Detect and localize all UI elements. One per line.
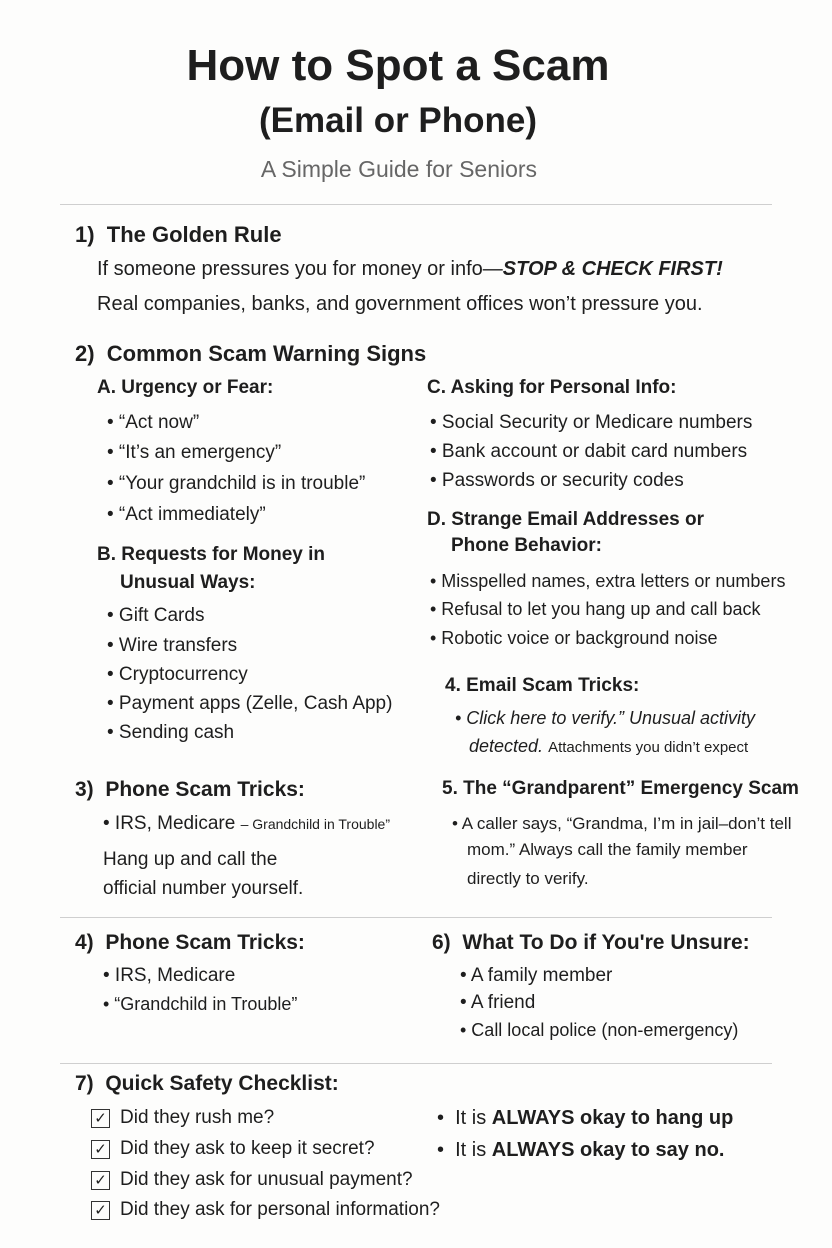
section 6: what to do: • A friend: [460, 992, 535, 1013]
section 6: what to do: [432, 931, 750, 1040]
subtitle: email or phone: (Email or Phone): [259, 101, 537, 140]
section 7: checklist: • It is ALWAYS okay to hang up: [437, 1107, 733, 1129]
panel A: urgency: • “It’s an emergency”: [107, 442, 281, 463]
section 7: checklist: 7) Quick Safety Checklist:: [75, 1072, 339, 1095]
title: How to Spot a Scam: [187, 41, 609, 90]
section 2 heading: 2) Common Scam Warning Signs: [75, 341, 426, 366]
panel D: strange addresses: Phone Behavior:: [451, 535, 602, 556]
panel B: money requests: • Wire transfers: [107, 635, 237, 656]
section 7: checklist: ✓: [94, 1141, 107, 1158]
section 7: checklist: Did they ask for personal information?: [120, 1199, 440, 1220]
section 1: golden rule: If someone pressures you for money or info—STOP & CHECK FIRST!: [97, 258, 723, 280]
section 3: phone scam tricks: official number yourself.: [103, 878, 303, 899]
panel C: personal info: • Passwords or security codes: [430, 470, 684, 491]
section 6: what to do: • Call local police (non-emergency): [460, 1020, 738, 1040]
panel A: urgency: • “Act immediately”: [107, 504, 266, 525]
panel B: money requests: B. Requests for Money in: [97, 544, 325, 565]
section 1: golden rule: Real companies, banks, and government offices won’t pressure you.: [97, 293, 703, 315]
panel B: money requests: [97, 544, 392, 743]
section 4: phone scam tricks: • IRS, Medicare: [103, 965, 235, 986]
section 7: checklist: Did they rush me?: [120, 1107, 274, 1128]
section 4: phone scam tricks: [75, 931, 305, 1014]
panel A: urgency: • “Your grandchild is in trouble”: [107, 473, 365, 494]
panel 4: email scam tricks: [445, 675, 756, 756]
panel 4: email scam tricks: • Click here to verify.” Unusual activity: [455, 708, 755, 728]
section 7: checklist: • It is ALWAYS okay to say no.: [437, 1139, 724, 1161]
section 7: checklist: Did they ask to keep it secret?: [120, 1138, 375, 1159]
panel 4: email scam tricks: detected. Attachments you didn’t expect: [469, 736, 748, 756]
panel A: urgency: [97, 377, 365, 525]
panel D: strange addresses: • Misspelled names, extra letters or numbers: [430, 571, 785, 591]
panel D: strange addresses: • Refusal to let you hang up and call back: [430, 599, 761, 619]
panel 5: grandparent scam: [442, 778, 799, 888]
panel 5: grandparent scam: 5. The “Grandparent” Emergency Scam: [442, 778, 799, 799]
panel B: money requests: • Gift Cards: [107, 605, 204, 626]
panel B: money requests: • Sending cash: [107, 722, 234, 743]
section 3: phone scam tricks: [75, 778, 390, 899]
panel C: personal info: • Bank account or dabit card numbers: [430, 441, 747, 462]
section 6: what to do: • A family member: [460, 965, 612, 986]
panel C: personal info: • Social Security or Medicare numbers: [430, 412, 752, 433]
section 3: phone scam tricks: • IRS, Medicare – Grandchild in Trouble”: [103, 813, 390, 834]
section 4: phone scam tricks: • “Grandchild in Trouble”: [103, 994, 297, 1014]
section 6: what to do: 6) What To Do if You're Unsure:: [432, 931, 750, 954]
tagline: A Simple Guide for Seniors: [261, 156, 537, 182]
panel B: money requests: Unusual Ways:: [120, 572, 256, 593]
panel B: money requests: • Cryptocurrency: [107, 664, 248, 685]
section 1: golden rule: 1) The Golden Rule: [75, 222, 282, 247]
section 7: checklist: ✓: [94, 1110, 107, 1127]
section 4: phone scam tricks: 4) Phone Scam Tricks:: [75, 931, 305, 954]
section 7: checklist: ✓: [94, 1172, 107, 1189]
panel A: urgency: • “Act now”: [107, 412, 199, 433]
section 7: checklist: [75, 1072, 733, 1220]
panel D: strange addresses: • Robotic voice or background noise: [430, 628, 717, 648]
section 1: golden rule: [75, 222, 723, 315]
section 3: phone scam tricks: 3) Phone Scam Tricks:: [75, 778, 305, 801]
panel 4: email scam tricks: 4. Email Scam Tricks:: [445, 675, 639, 696]
panel B: money requests: • Payment apps (Zelle, Cash App): [107, 693, 392, 714]
panel 5: grandparent scam: directly to verify.: [467, 869, 589, 888]
panel 5: grandparent scam: • A caller says, “Grandma, I’m in jail–don’t tell: [452, 814, 791, 833]
panel 5: grandparent scam: mom.” Always call the family member: [467, 840, 748, 859]
section 7: checklist: ✓: [94, 1202, 107, 1219]
panel D: strange addresses: [427, 509, 785, 648]
panel D: strange addresses: D. Strange Email Addresses or: [427, 509, 704, 530]
section 7: checklist: Did they ask for unusual payment?: [120, 1169, 413, 1190]
panel C: personal info: C. Asking for Personal Info:: [427, 377, 676, 398]
section 3: phone scam tricks: Hang up and call the: [103, 849, 277, 870]
panel C: personal info: [427, 377, 752, 491]
panel A: urgency: A. Urgency or Fear:: [97, 377, 273, 398]
